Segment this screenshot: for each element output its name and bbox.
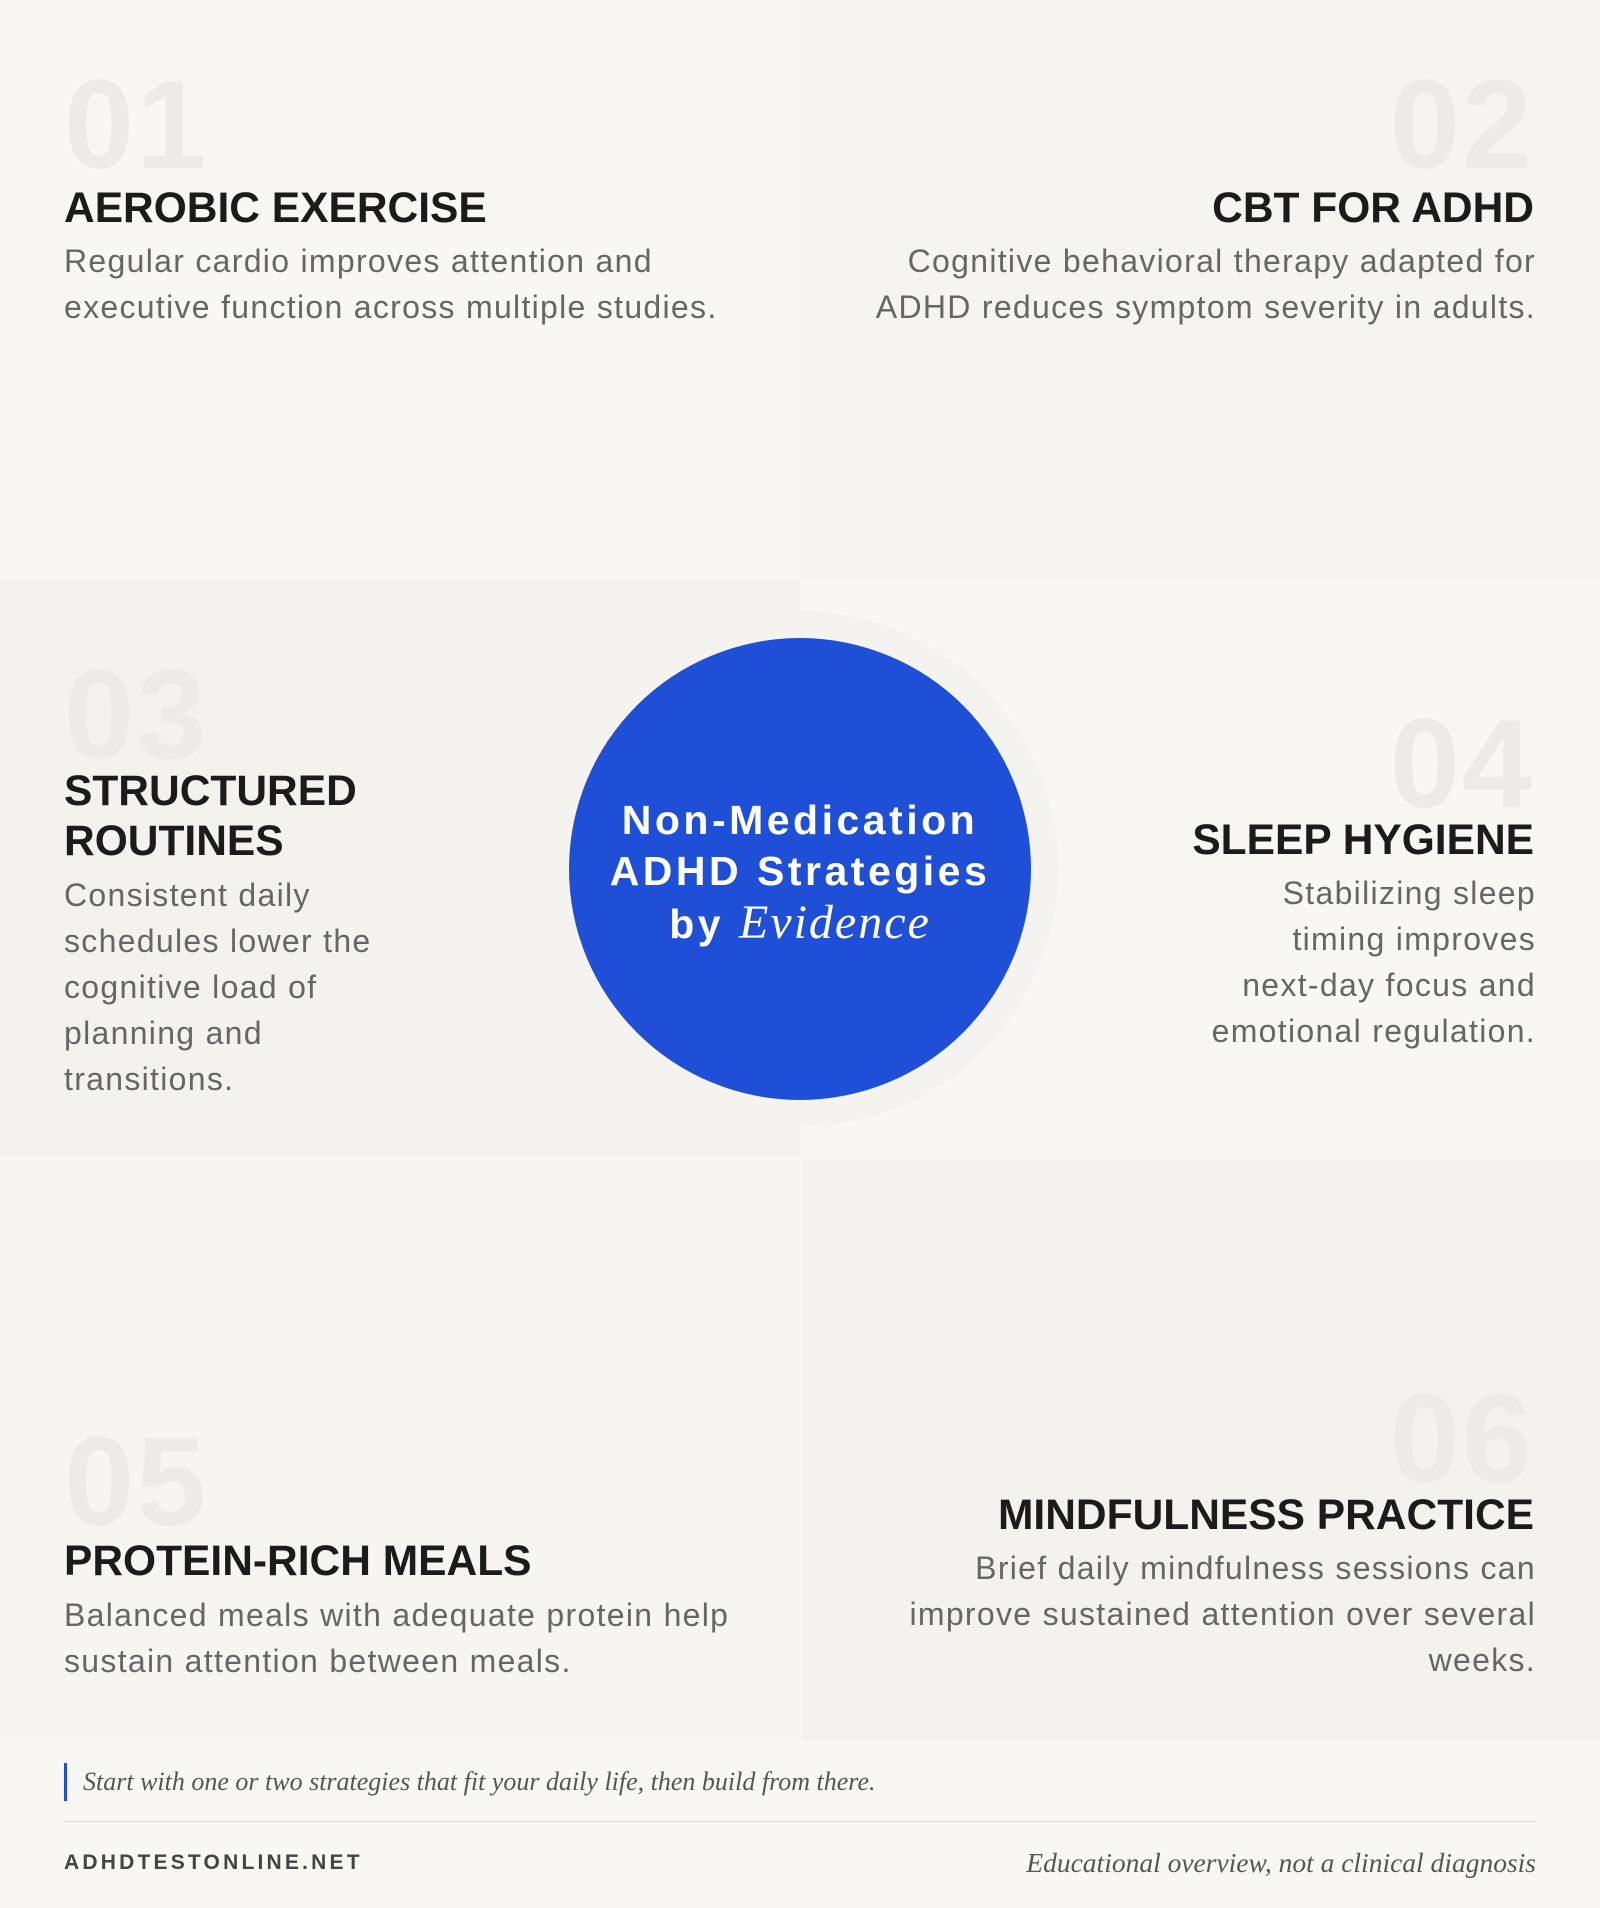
text: sleep: next-day focus and (1242, 967, 1536, 1003)
text: cbt: ADHD reduces symptom severity in adults. (876, 289, 1536, 325)
text: aerobic (64, 243, 718, 325)
text: cbt (876, 243, 1536, 325)
heading: structured routines (64, 768, 357, 865)
heading: aerobic exercise: AEROBIC EXERCISE (64, 185, 487, 232)
heading: cbt: CBT FOR ADHD (1212, 185, 1534, 232)
text: sleep: emotional regulation. (1212, 1013, 1536, 1049)
number 01: 01 (64, 54, 208, 195)
text: routines: planning and (64, 1015, 263, 1051)
center circle (542, 611, 1058, 1127)
footer quote: Start with one or two strategies that fit your daily life, then build from there. (83, 1767, 875, 1796)
heading: mindfulness: MINDFULNESS PRACTICE (998, 1492, 1534, 1539)
text: cbt: Cognitive behavioral therapy adapted for (908, 243, 1536, 279)
heading: structured routines: ROUTINES (64, 818, 284, 865)
title: ADHD Strategies (610, 848, 990, 894)
text: mindfulness: improve sustained attention over several (909, 1596, 1536, 1632)
text: aerobic: Regular cardio improves attention and (64, 243, 653, 279)
heading: structured routines: STRUCTURED (64, 768, 357, 815)
text: routines: Consistent daily (64, 877, 311, 913)
text: sleep: Stabilizing sleep (1283, 875, 1536, 911)
panel: 02 (800, 0, 1600, 580)
number 06: 06 (1390, 1368, 1534, 1509)
number 03: 03 (64, 644, 208, 785)
footer brand: ADHDTESTONLINE.NET (64, 1851, 363, 1874)
heading: protein-rich meals: PROTEIN-RICH MEALS (64, 1538, 532, 1585)
text: routines (64, 877, 372, 1097)
panel: 03 (0, 580, 800, 1158)
number 02: 02 (1390, 54, 1534, 195)
title: Non-Medication (622, 797, 978, 843)
text: sleep: timing improves (1292, 921, 1536, 957)
text: mindfulness: Brief daily mindfulness sessions can (975, 1550, 1536, 1586)
text: mindfulness (909, 1550, 1536, 1678)
title: by Evidence (669, 896, 931, 949)
text: protein: sustain attention between meals. (64, 1643, 572, 1679)
text: routines: transitions. (64, 1061, 234, 1097)
panel: 05 (0, 1160, 800, 1740)
number 04: 04 (1390, 693, 1534, 834)
text: routines: cognitive load of (64, 969, 317, 1005)
text: sleep (1212, 875, 1536, 1049)
text: routines: schedules lower the (64, 923, 372, 959)
text: mindfulness: weeks. (1429, 1642, 1536, 1678)
text: aerobic: executive function across multiple studies. (64, 289, 718, 325)
footer disclaimer: Educational overview, not a clinical diagnosis (1026, 1847, 1536, 1878)
text: protein: Balanced meals with adequate protein help (64, 1597, 729, 1633)
text: protein (64, 1597, 729, 1679)
panel: 06 (802, 1160, 1600, 1740)
panel: 01 (0, 0, 800, 580)
title (569, 638, 1031, 1100)
number 05: 05 (64, 1411, 208, 1552)
panel: 04 (800, 580, 1600, 1158)
heading: sleep hygiene: SLEEP HYGIENE (1192, 817, 1534, 864)
